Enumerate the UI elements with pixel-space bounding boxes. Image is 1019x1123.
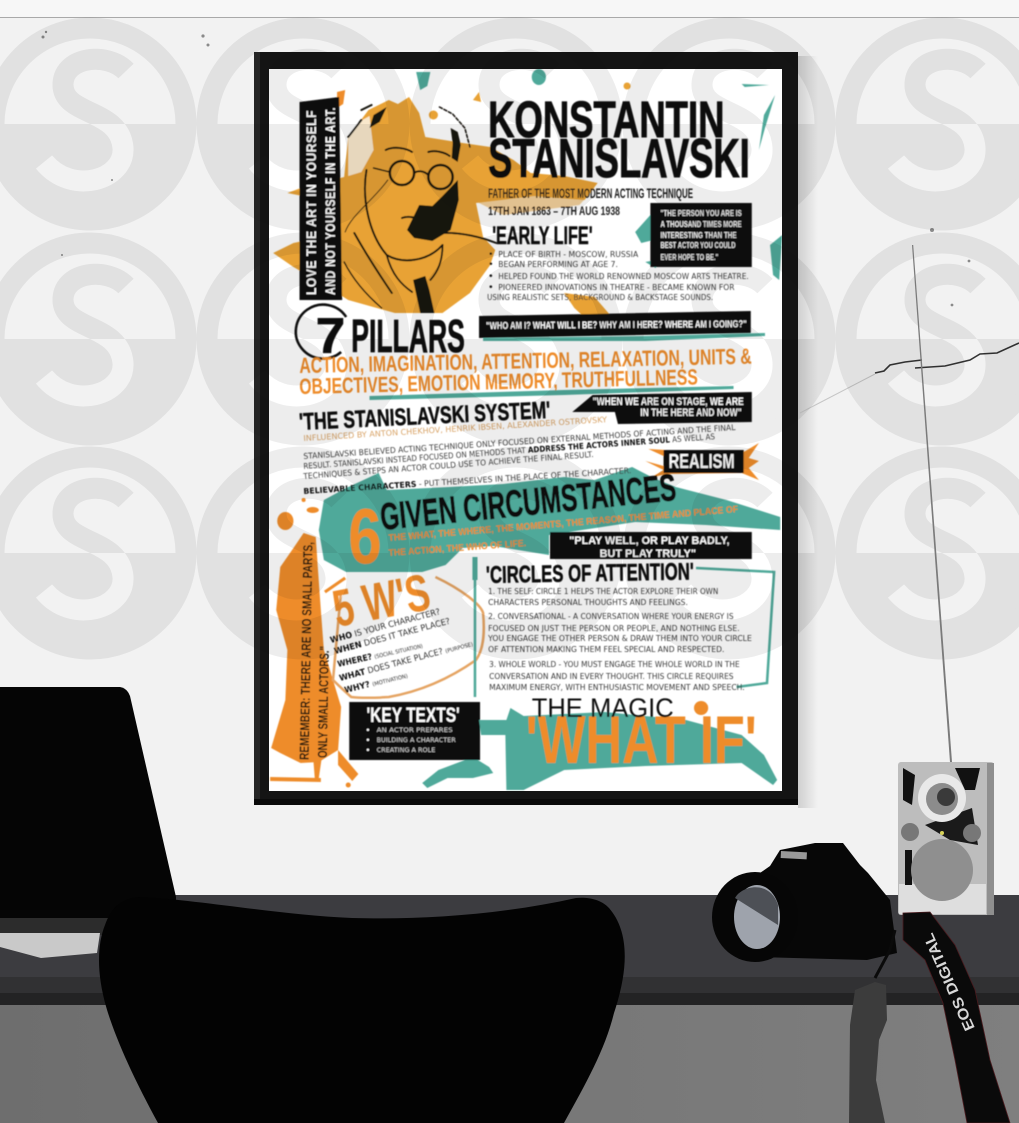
system body text: STANISLAVSKI BELIEVED ACTING TECHNIQUE ONLY FOCUSED ON EXTERNAL METHODS OF ACTING AND THE FINAL (303, 423, 736, 461)
quote box: on stage: "WHEN WE ARE ON STAGE, WE ARE (593, 396, 744, 408)
circles of attention text (487, 587, 752, 692)
frame shadow (798, 56, 818, 808)
7 pillars heading: PILLARS (351, 310, 465, 362)
circles of attention text: 2. CONVERSATIONAL - A CONVERSATION WHERE YOUR ENERGY IS (488, 612, 734, 621)
quote box: the person you are: BEST ACTOR YOU COULD (661, 240, 736, 250)
watermark overlay (0, 28, 1019, 649)
title: STANISLAVSKI (488, 127, 750, 189)
system body text: RESULT. STANISLAVSKI INSTEAD FOCUSED ON METHODS THAT ADDRESS THE ACTORS INNER SOUL AS WELL AS (303, 432, 715, 471)
floor area (0, 1005, 1019, 1123)
circles of attention text: YOU ENGAGE THE OTHER PERSON & DRAW THEM INTO YOUR CIRCLE (487, 634, 752, 643)
early life list: PIONEERED INNOVATIONS IN THEATRE - BECAME KNOWN FOR (498, 283, 735, 292)
given circumstances heading (350, 473, 676, 565)
key texts box: BUILDING A CHARACTER (377, 736, 456, 744)
quote box: the person you are: EVER HOPE TO BE." (661, 252, 718, 262)
title (488, 100, 748, 179)
5 W's panel: WHAT DOES TAKE PLACE? (PURPOSE) (338, 639, 474, 684)
who am I quote bar (479, 311, 751, 338)
5 W's panel (325, 564, 484, 698)
wall specks and crack (42, 31, 1019, 413)
seven pillars list: ACTION, IMAGINATION, ATTENTION, RELAXATION, UNITS & (299, 344, 752, 378)
circles of attention text: FOCUSED ON JUST THE PERSON OR PEOPLE, AND NOTHING ELSE. (488, 624, 740, 633)
early life list: • (488, 250, 494, 260)
system heading: 'THE STANISLAVSKI SYSTEM' (299, 397, 551, 436)
what if heading (528, 700, 755, 764)
quote box: the person you are (650, 203, 752, 267)
quote box: the person you are: "THE PERSON YOU ARE IS (661, 208, 742, 218)
circles of attention heading: 'CIRCLES OF ATTENTION' (486, 559, 694, 589)
early life list: PLACE OF BIRTH - MOSCOW, RUSSIA (498, 250, 639, 259)
who am I quote bar: "WHO AM I? WHAT WILL I BE? WHY AM I HERE? WHERE AM I GOING?" (486, 319, 747, 332)
early life list: • (488, 283, 494, 293)
decorative teal spots (416, 69, 782, 280)
radio antenna (912, 245, 952, 762)
given circumstances heading: GIVEN CIRCUMSTANCES (378, 466, 678, 539)
quote box: play well (550, 532, 752, 560)
early life list: USING REALISTIC SETS, BACKGROUND & BACKSTAGE SOUNDS. (487, 293, 713, 302)
early life list: BEGAN PERFORMING AT AGE 7. (498, 260, 618, 269)
key texts box: AN ACTOR PREPARES (377, 726, 453, 734)
circumstances orange text: THE ACTION, THE WHO OF LIFE. (388, 538, 527, 559)
vertical reminder note: REMEMBER: THERE ARE NO SMALL PARTS, (297, 542, 316, 760)
vertical quote banner: LOVE THE ART IN YOURSELF (303, 110, 319, 295)
key texts box: CREATING A ROLE (377, 746, 435, 754)
early life list: • (488, 260, 494, 270)
circles of attention text: 1. THE SELF: CIRCLE 1 HELPS THE ACTOR EXPLORE THEIR OWN (488, 587, 718, 596)
subtitle: FATHER OF THE MOST MODERN ACTING TECHNIQUE (488, 185, 693, 201)
chair (99, 897, 625, 1123)
ink drawing (344, 105, 496, 308)
key texts box (349, 702, 480, 760)
camera strap: EOS DIGITAL (920, 930, 979, 1033)
5 W's panel: 5 W'S (328, 564, 435, 639)
teal brush behind key texts (422, 757, 493, 788)
circles of attention text: OF ATTENTION MAKING THEM FEEL SPECIAL AND RESPECTED. (488, 645, 724, 654)
circles of attention teal frame (475, 557, 774, 697)
7 pillars heading (296, 305, 465, 364)
seven pillars list: OBJECTIVES, EMOTION MEMORY, TRUTHFULLNESS (299, 365, 698, 399)
what if heading: 'WHAT IF' (526, 701, 757, 778)
vertical quote banner: AND NOT YOURSELF IN THE ART. (322, 107, 338, 295)
title: KONSTANTIN (488, 91, 724, 148)
desk (0, 895, 1019, 1005)
teal brush line (483, 333, 765, 341)
circles of attention text: CONVERSATION AND IN EVERY THOUGHT. THIS CIRCLE REQUIRES (489, 672, 734, 681)
quote box: the person you are: INTERESTING THAN THE (661, 230, 737, 240)
quote box: play well: BUT PLAY TRULY" (600, 548, 696, 560)
laptop (0, 687, 176, 958)
teal brush band (319, 467, 780, 572)
camera strap (849, 912, 1010, 1123)
system body text (302, 423, 736, 481)
browser top strip (0, 0, 1019, 18)
vertical reminder note: ONLY SMALL ACTORS." (315, 646, 332, 758)
vertical quote banner (300, 97, 342, 300)
influences line: INFLUENCED BY ANTON CHEKHOV, HENRIK IBSEN, ALEXANDER OSTROVSKY (303, 415, 607, 443)
5 W's panel: WHERE? (SOCIAL SITUATION) (336, 641, 424, 670)
quote box: on stage: IN THE HERE AND NOW" (640, 407, 742, 419)
system body text: TECHNIQUES & STEPS AN ACTOR COULD USE TO ACHIEVE THE FINAL RESULT. (302, 450, 594, 481)
quote box: play well: "PLAY WELL, OR PLAY BADLY, (569, 535, 729, 547)
left orange paint column (270, 498, 358, 788)
5 W's panel: WHEN DOES IT TAKE PLACE? (333, 617, 451, 657)
poster (269, 69, 782, 791)
picture frame (254, 52, 798, 805)
early life heading: 'EARLY LIFE' (492, 222, 593, 250)
seven pillars list (299, 348, 752, 396)
5 W's panel: WHO IS YOUR CHARACTER? (329, 607, 441, 646)
key texts box: • (365, 726, 370, 735)
circles of attention text: MAXIMUM ENERGY, WITH ENTHUSIASTIC MOVEMENT AND SPEECH. (489, 683, 745, 692)
5 W's panel: WHY? (MOTIVATION) (343, 671, 409, 696)
early life list: • (488, 272, 494, 282)
radio (898, 762, 994, 915)
circles of attention text: 3. WHOLE WORLD - YOU MUST ENGAGE THE WHOLE WORLD IN THE (489, 660, 740, 669)
key texts box: • (365, 746, 370, 755)
early life list: HELPED FOUND THE WORLD RENOWNED MOSCOW ARTS THEATRE. (498, 272, 749, 281)
teal brush behind what if (479, 708, 777, 790)
realism badge: REALISM (669, 451, 735, 473)
orange paint splash (273, 97, 598, 313)
key texts box: 'KEY TEXTS' (366, 704, 460, 727)
circles of attention text: CHARACTERS PERSONAL THOUGHTS AND FEELINGS. (488, 598, 688, 607)
circumstances orange text: THE WHAT, THE WHERE, THE MOMENTS, THE REASON, THE TIME AND PLACE OF (388, 504, 739, 544)
7 pillars heading: 7 (316, 307, 345, 364)
key texts box: • (365, 736, 370, 745)
given circumstances heading: 6 (348, 492, 382, 580)
believable characters line: BELIEVABLE CHARACTERS - PUT THEMSELVES IN THE PLACE OF THE CHARACTER. (303, 466, 632, 496)
quote box: the person you are: A THOUSAND TIMES MORE (661, 219, 742, 229)
realism badge (645, 443, 759, 480)
dates: 17TH JAN 1863 – 7TH AUG 1938 (488, 204, 620, 218)
portrait of Stanislavski (273, 82, 631, 322)
camera (712, 843, 897, 962)
circumstances orange text (388, 504, 739, 559)
the magic heading: THE MAGIC (532, 692, 674, 723)
vertical reminder note (299, 542, 330, 760)
teal underline (370, 386, 734, 400)
quote box: on stage (572, 392, 752, 424)
early life list (487, 250, 749, 302)
